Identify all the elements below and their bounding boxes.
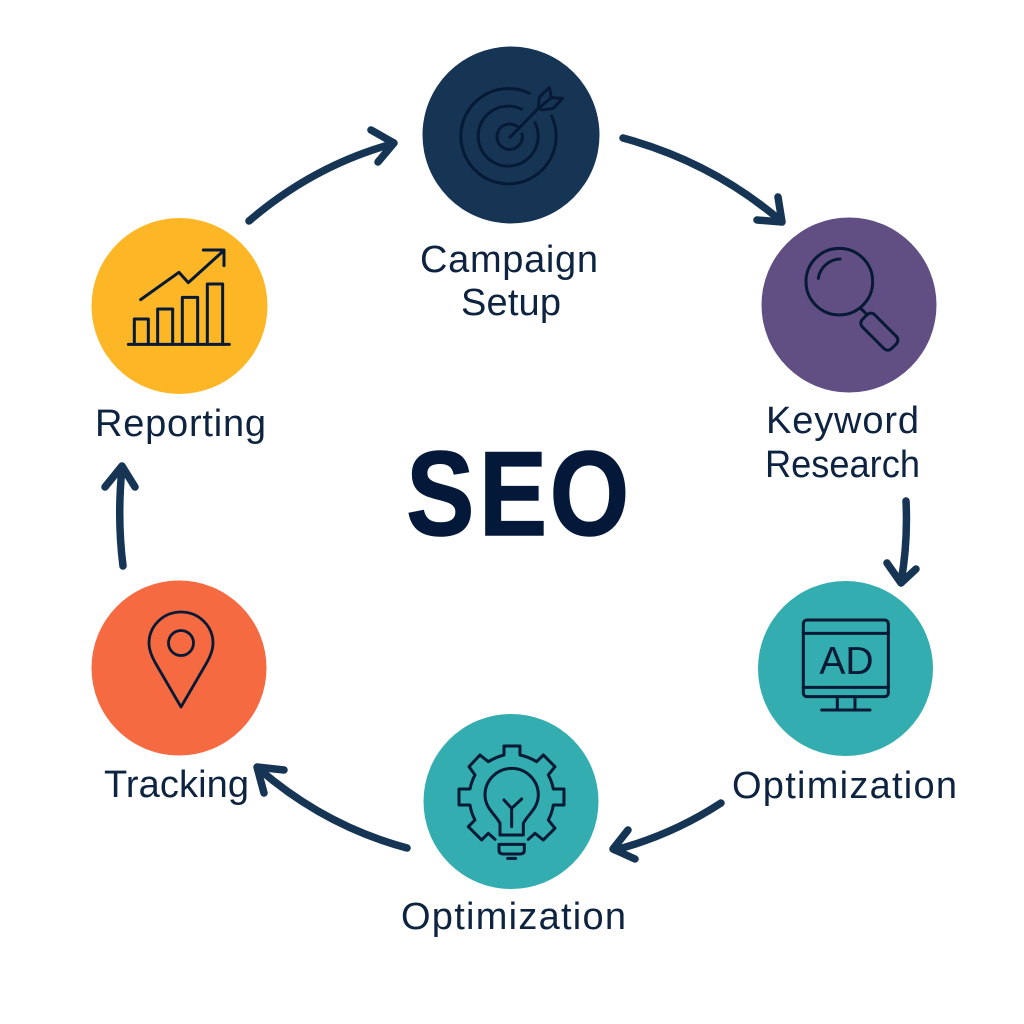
label: Reporting: Reporting <box>95 403 266 445</box>
circle: tracking <box>92 580 266 756</box>
label: Keyword Research: Research <box>765 444 920 486</box>
icon: target with arrow <box>461 87 563 184</box>
label: Optimization: Optimization <box>401 896 626 938</box>
icon: AD monitor <box>803 620 888 710</box>
arrow: ad optimization to optimization <box>613 803 721 859</box>
label: Campaign Setup <box>420 239 598 324</box>
icon: magnifying glass <box>806 248 900 352</box>
arrow: keyword research to ad optimization <box>887 501 916 583</box>
arrow: optimization to tracking <box>257 767 407 848</box>
circle: ad optimization <box>758 581 933 756</box>
label: Optimization: Optimization <box>732 765 957 807</box>
step: Campaign Setup <box>420 46 600 324</box>
circle: keyword research <box>762 218 936 392</box>
icon: gear with light bulb <box>459 746 564 858</box>
label: Keyword Research: Keyword <box>766 400 919 442</box>
title: SEO: SEO <box>406 426 629 561</box>
label: Campaign Setup: Campaign <box>420 239 598 281</box>
icon: location pin <box>149 612 213 707</box>
label: Tracking: Tracking <box>104 764 249 806</box>
circle: campaign setup <box>422 46 600 224</box>
circle: optimization <box>424 714 598 889</box>
arrow: reporting to campaign setup <box>249 130 394 221</box>
icon text: AD: AD <box>819 640 874 683</box>
step: Reporting <box>92 218 268 445</box>
arrow: tracking to reporting <box>105 466 135 566</box>
step: Tracking <box>92 580 266 806</box>
arrow: campaign setup to keyword research <box>623 138 782 222</box>
label: Keyword Research <box>765 400 920 486</box>
circle: reporting <box>92 218 268 394</box>
step: Ad Optimization <box>732 581 957 807</box>
step: Keyword Research <box>762 218 936 486</box>
step: Optimization <box>401 714 626 938</box>
label: Campaign Setup: Setup <box>461 282 561 324</box>
icon: bar chart with rising arrow <box>128 250 229 344</box>
